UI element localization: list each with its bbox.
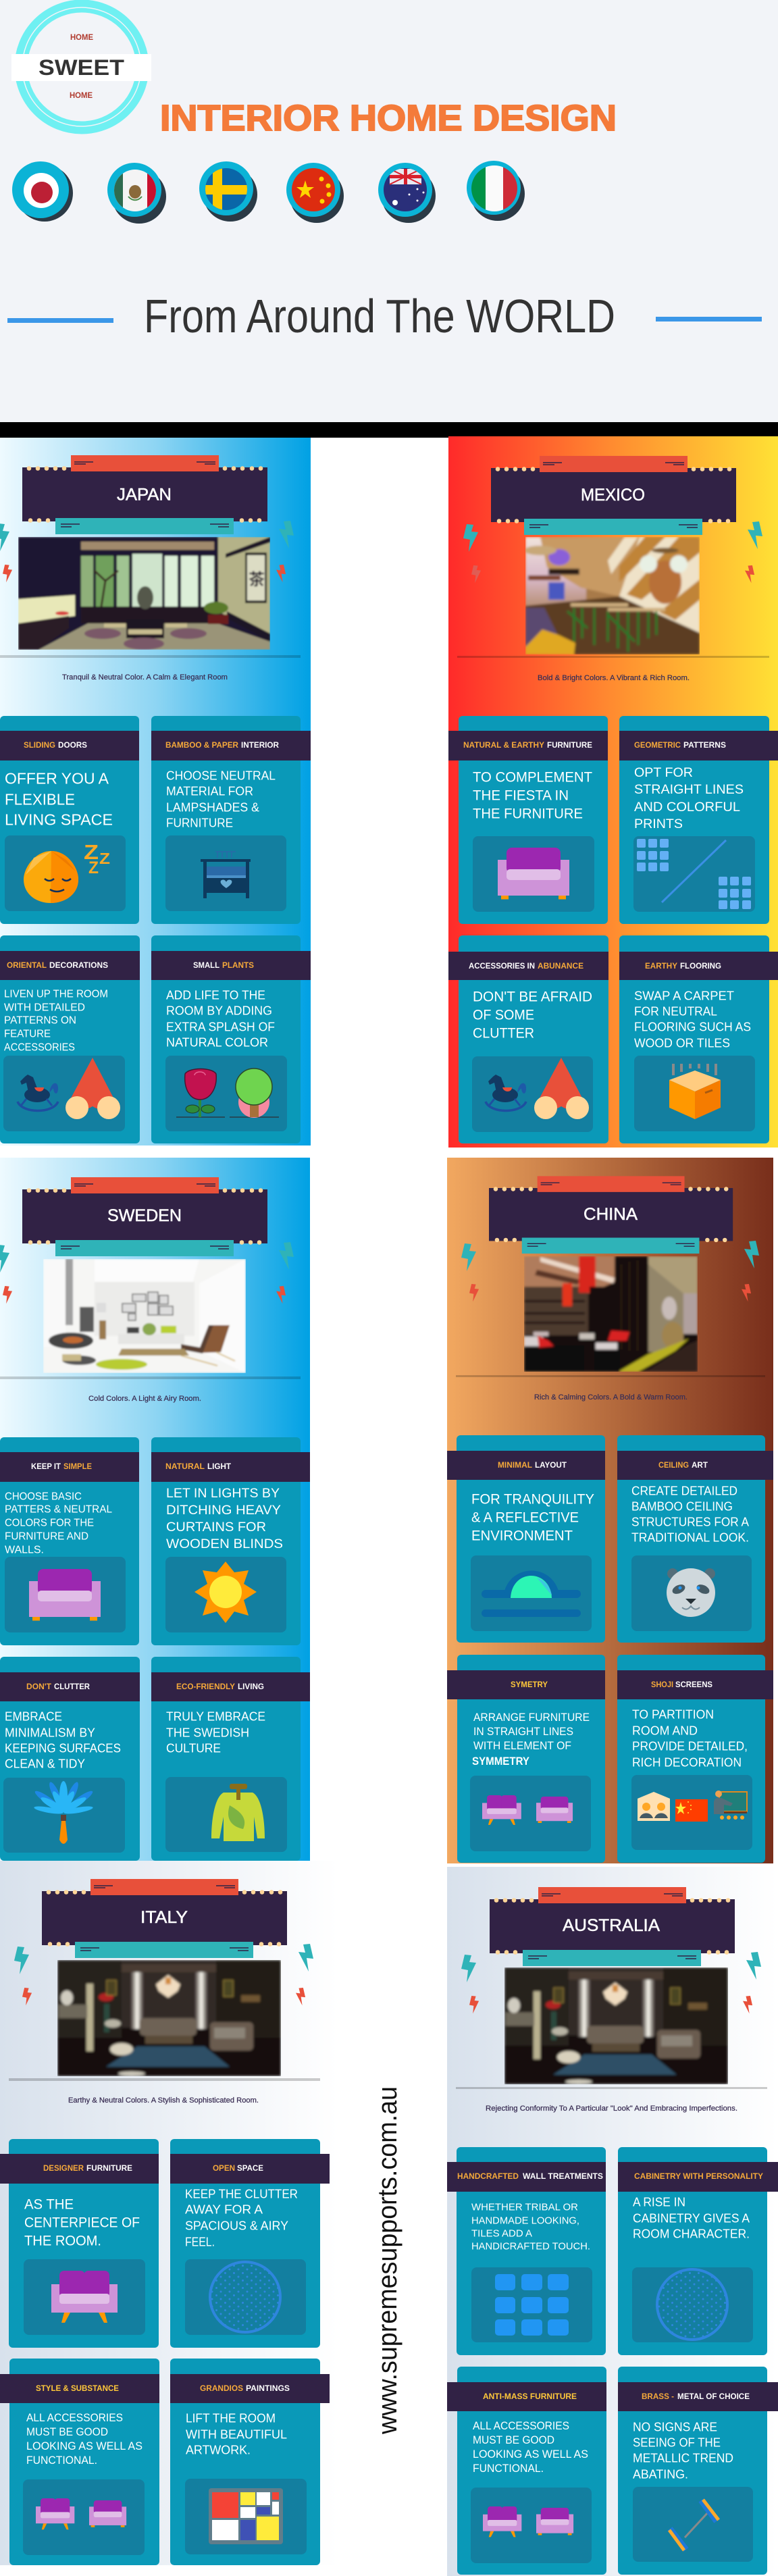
caption: Tranquil & Neutral Color. A Calm & Elegant Room bbox=[62, 673, 228, 681]
body text: DON'T BE AFRAID bbox=[473, 989, 592, 1005]
photo: japan room bbox=[18, 537, 270, 650]
icon: feather duster bbox=[3, 1778, 125, 1853]
body text: FURNITURE AND bbox=[5, 1531, 88, 1543]
subtitle: from around the world: From Around The WORLD bbox=[144, 290, 615, 342]
body text: ARRANGE FURNITURE bbox=[473, 1711, 590, 1724]
card: accessories in abundance bbox=[448, 935, 608, 1143]
body text bbox=[4, 989, 108, 1054]
panel: mexico bbox=[448, 436, 778, 1148]
banner: japan: JAPAN bbox=[117, 485, 172, 504]
title: INTERIOR HOME DESIGN bbox=[160, 99, 617, 138]
icon: abstract painting bbox=[185, 2479, 307, 2554]
banner: australia bbox=[490, 1887, 735, 1966]
body text: DITCHING HEAVY bbox=[166, 1503, 281, 1518]
caption: Rich & Calming Colors. A Bold & Warm Room. bbox=[534, 1393, 688, 1401]
icon: lightning bolts bbox=[461, 1241, 759, 1302]
body text bbox=[166, 769, 276, 829]
icon: sunrise over water bbox=[471, 1555, 592, 1631]
body text: TO PARTITION bbox=[632, 1707, 714, 1721]
body text bbox=[186, 2411, 287, 2457]
icon: sleeping face bbox=[5, 835, 126, 911]
icon: dotted plate bbox=[632, 2267, 753, 2342]
icon: rose and tree bbox=[165, 1056, 287, 1131]
label bbox=[457, 2171, 603, 2181]
panel: japan bbox=[0, 438, 311, 1145]
logo: home sweet home badge: HOME bbox=[70, 32, 93, 42]
card: anti-mass furniture bbox=[447, 2367, 606, 2575]
label: DOORS bbox=[58, 740, 87, 750]
icon: home, china flag and teacher bbox=[631, 1775, 752, 1850]
card: oriental decorations bbox=[0, 935, 140, 1143]
banner: japan bbox=[22, 455, 267, 534]
banner: china bbox=[489, 1176, 733, 1254]
card: small plants bbox=[151, 935, 311, 1143]
card: earthy flooring bbox=[619, 935, 778, 1143]
body text bbox=[5, 1710, 121, 1771]
label bbox=[31, 1462, 92, 1471]
icon: lightning bolts bbox=[0, 521, 294, 582]
label: GEOMETRIC bbox=[634, 740, 681, 750]
body text: HANDMADE LOOKING, bbox=[471, 2215, 579, 2226]
label bbox=[176, 1682, 264, 1691]
label bbox=[43, 2163, 132, 2173]
body text: SPACIOUS & AIRY bbox=[185, 2219, 288, 2233]
body text: ROOM AND bbox=[632, 1724, 698, 1737]
body text bbox=[471, 2201, 590, 2252]
caption: Earthy & Neutral Colors. A Stylish & Sophisticated Room. bbox=[68, 2096, 259, 2105]
body text bbox=[26, 2412, 142, 2467]
body text: ROOM CHARACTER. bbox=[633, 2227, 750, 2241]
body text bbox=[166, 1486, 283, 1551]
body text: IN STRAIGHT LINES bbox=[473, 1726, 573, 1738]
body text: LIFT THE ROOM bbox=[186, 2411, 276, 2425]
icon: sleeping face: Z bbox=[99, 850, 110, 867]
divider bbox=[9, 2078, 320, 2081]
label: ABUNANCE bbox=[538, 961, 584, 971]
body text: & A REFLECTIVE bbox=[471, 1510, 579, 1526]
label: NATURAL & EARTHY bbox=[463, 740, 544, 750]
body text: BAMBOO CEILING bbox=[631, 1499, 733, 1513]
body text bbox=[633, 2421, 733, 2481]
card: minimal layout bbox=[447, 1435, 605, 1643]
photo: australia room bbox=[504, 1967, 728, 2084]
body text: PRINTS bbox=[634, 817, 683, 831]
label bbox=[645, 961, 721, 971]
logo: home sweet home badge: HOME bbox=[70, 91, 93, 100]
label: SCREENS bbox=[675, 1680, 712, 1689]
body text: CURTAINS FOR bbox=[166, 1520, 266, 1535]
body text: THE FIESTA IN bbox=[473, 788, 569, 804]
label bbox=[26, 1682, 90, 1691]
label: LIGHT bbox=[207, 1462, 232, 1471]
body text: THE SWEDISH bbox=[166, 1726, 249, 1740]
label: INTERIOR bbox=[241, 740, 279, 750]
icon: brass barbell bbox=[633, 2487, 753, 2562]
body text: WALLS. bbox=[5, 1545, 44, 1556]
icon: flooring box bbox=[634, 1056, 755, 1131]
label: CEILING bbox=[658, 1460, 689, 1470]
label: SHOJI bbox=[651, 1680, 673, 1689]
label: ANTI-MASS FURNITURE bbox=[483, 2392, 577, 2401]
body text: LOOKING AS WELL AS bbox=[26, 2440, 142, 2452]
body text: CREATE DETAILED bbox=[631, 1485, 737, 1498]
body text: AS THE bbox=[24, 2197, 74, 2213]
body text bbox=[633, 2195, 750, 2241]
panel: sweden bbox=[0, 1158, 310, 1861]
label: METAL OF CHOICE bbox=[677, 2392, 750, 2401]
icon: japan flag bbox=[12, 161, 73, 222]
label: SPACE bbox=[237, 2163, 263, 2173]
body text bbox=[634, 765, 744, 831]
body text: WITH DETAILED bbox=[4, 1002, 85, 1014]
card: style and substance bbox=[0, 2359, 159, 2565]
label: GRANDIOS bbox=[200, 2384, 243, 2393]
body text: WOODEN BLINDS bbox=[166, 1537, 283, 1551]
body text: ADD LIFE TO THE bbox=[166, 989, 265, 1002]
photo: sweden room bbox=[43, 1259, 246, 1373]
label bbox=[165, 1462, 232, 1471]
body text: LOOKING AS WELL AS bbox=[473, 2448, 588, 2461]
label: DECORATIONS bbox=[49, 960, 108, 970]
divider bbox=[456, 1375, 765, 1377]
label bbox=[213, 2163, 263, 2173]
body text: MUST BE GOOD bbox=[473, 2434, 554, 2446]
body text: OPT FOR bbox=[634, 765, 693, 780]
body text: EXTRA SPLASH OF bbox=[166, 1020, 275, 1033]
card: natural and earthy furniture bbox=[448, 716, 608, 924]
label bbox=[200, 2384, 290, 2393]
body text bbox=[472, 1711, 590, 1768]
flag row bbox=[12, 161, 525, 224]
body text: AND COLORFUL bbox=[634, 800, 740, 815]
label bbox=[658, 1460, 708, 1470]
body text: CABINETRY GIVES A bbox=[633, 2211, 750, 2225]
card: natural light bbox=[151, 1437, 310, 1645]
body text: ABATING. bbox=[633, 2468, 688, 2481]
card: don't clutter bbox=[0, 1657, 140, 1861]
body text: FLEXIBLE bbox=[5, 790, 75, 808]
body text: SYMMETRY bbox=[472, 1755, 529, 1768]
icon: sleeping face: Z bbox=[84, 840, 99, 864]
body text: SEEING OF THE bbox=[633, 2436, 721, 2449]
body text: TILES ADD A bbox=[471, 2227, 532, 2239]
card: bamboo and paper interior bbox=[151, 716, 311, 924]
caption: Rejecting Conformity To A Particular "Look" And Embracing Imperfections. bbox=[486, 2105, 737, 2113]
label: SIMPLE bbox=[63, 1462, 92, 1471]
label: BAMBOO & PAPER bbox=[165, 740, 238, 750]
label: LIVING bbox=[238, 1682, 264, 1691]
icon: italy flag bbox=[467, 161, 525, 221]
body text: SWAP A CARPET bbox=[634, 989, 734, 1002]
label: FURNITURE bbox=[86, 2163, 132, 2173]
icon: sofa bbox=[473, 836, 594, 912]
label bbox=[651, 1680, 712, 1689]
label bbox=[498, 1460, 567, 1470]
body text: WOOD OR TILES bbox=[634, 1036, 730, 1050]
banner: mexico bbox=[491, 456, 736, 535]
icon: china flag bbox=[286, 163, 344, 223]
body text: WHETHER TRIBAL OR bbox=[471, 2201, 578, 2213]
label: LAYOUT bbox=[535, 1460, 567, 1470]
divider bbox=[457, 656, 769, 658]
card: keep it simple bbox=[0, 1437, 139, 1645]
body text: STRUCTURES FOR A bbox=[631, 1516, 749, 1529]
label: ECO-FRIENDLY bbox=[176, 1682, 235, 1691]
body text: HANDICRAFTED TOUCH. bbox=[471, 2240, 590, 2252]
label: CABINETRY WITH PERSONALITY bbox=[634, 2171, 763, 2181]
body text bbox=[632, 1707, 748, 1770]
body text: OF SOME bbox=[473, 1008, 534, 1023]
label: HANDCRAFTED bbox=[457, 2171, 519, 2181]
label bbox=[24, 740, 87, 750]
divider bbox=[456, 2087, 767, 2089]
card: sliding doors bbox=[0, 716, 139, 924]
body text: CLUTTER bbox=[473, 1026, 534, 1041]
banner: australia: AUSTRALIA bbox=[563, 1916, 660, 1935]
label bbox=[165, 740, 279, 750]
body text: FEATURE bbox=[4, 1029, 51, 1040]
card: grandios paintings bbox=[170, 2359, 330, 2565]
label: FLOORING bbox=[680, 961, 721, 971]
body text: EMBRACE bbox=[5, 1710, 62, 1724]
label: DON'T bbox=[26, 1682, 52, 1691]
body text: ACCESSORIES bbox=[4, 1042, 75, 1054]
label: CLUTTER bbox=[54, 1682, 90, 1691]
body text: COLORS FOR THE bbox=[5, 1518, 94, 1529]
icon: tile grid bbox=[471, 2267, 592, 2342]
body text: OFFER YOU A bbox=[5, 770, 109, 788]
body text: WITH ELEMENT OF bbox=[473, 1740, 571, 1752]
label bbox=[469, 961, 584, 971]
label: FURNITURE bbox=[547, 740, 592, 750]
body text: MUST BE GOOD bbox=[26, 2426, 108, 2438]
banner: sweden: SWEDEN bbox=[107, 1206, 182, 1225]
body text: FEEL. bbox=[185, 2236, 215, 2249]
body text: LET IN LIGHTS BY bbox=[166, 1486, 280, 1501]
logo: home sweet home badge: SWEET bbox=[38, 55, 125, 80]
body text bbox=[473, 2420, 588, 2475]
label bbox=[193, 960, 254, 970]
body text: A RISE IN bbox=[633, 2195, 685, 2209]
label bbox=[463, 740, 592, 750]
label: PLANTS bbox=[222, 960, 254, 970]
icon: sofa bbox=[5, 1557, 126, 1632]
body text: LIVING SPACE bbox=[5, 810, 113, 828]
body text: KEEPING SURFACES bbox=[5, 1741, 121, 1755]
banner: china: CHINA bbox=[584, 1205, 638, 1224]
body text: RICH DECORATION bbox=[632, 1756, 742, 1770]
label: NATURAL bbox=[165, 1462, 205, 1471]
label bbox=[642, 2392, 750, 2401]
icon: lightning bolts bbox=[0, 1242, 294, 1304]
body text bbox=[631, 1485, 749, 1544]
body text: ARTWORK. bbox=[186, 2444, 251, 2457]
icon: two chairs bbox=[23, 2479, 145, 2555]
icon: sofa bbox=[24, 2259, 145, 2335]
body text: TO COMPLEMENT bbox=[473, 770, 592, 785]
card: cabinetry with personality bbox=[618, 2147, 778, 2355]
body text: TRADITIONAL LOOK. bbox=[631, 1530, 749, 1544]
label: MINIMAL bbox=[498, 1460, 532, 1470]
body text bbox=[471, 1492, 594, 1544]
icon: lightning bolts bbox=[461, 1952, 761, 2013]
label bbox=[7, 960, 108, 970]
icon: rocking horse and toy bbox=[3, 1056, 125, 1131]
label: SYMETRY bbox=[511, 1680, 548, 1689]
body text: PATTERS & NEUTRAL bbox=[5, 1504, 112, 1516]
icon: green sweater bbox=[165, 1777, 287, 1852]
panel: australia bbox=[447, 1867, 778, 2576]
photo: italy room bbox=[57, 1960, 281, 2076]
body text: CLEAN & TIDY bbox=[5, 1757, 85, 1771]
card: brass metal of choice bbox=[618, 2367, 778, 2575]
label: PATTERNS bbox=[683, 740, 726, 750]
label bbox=[634, 740, 726, 750]
body text: ENVIRONMENT bbox=[471, 1528, 573, 1544]
body text: ROOM BY ADDING bbox=[166, 1004, 272, 1017]
body text: METALLIC TREND bbox=[633, 2452, 733, 2465]
body text: FOR TRANQUILITY bbox=[471, 1492, 594, 1508]
card: open space bbox=[170, 2139, 330, 2348]
panel: china bbox=[447, 1158, 773, 1863]
banner: sweden bbox=[22, 1177, 267, 1256]
card: symetry bbox=[447, 1655, 605, 1863]
body text: THE FURNITURE bbox=[473, 806, 583, 822]
icon: geometric pattern bbox=[633, 836, 755, 912]
body text: STRAIGHT LINES bbox=[634, 782, 744, 797]
body text: CHOOSE NEUTRAL bbox=[166, 769, 276, 782]
body text: MATERIAL FOR bbox=[166, 785, 253, 798]
icon: sweden flag bbox=[199, 161, 257, 222]
logo: home sweet home badge bbox=[11, 6, 151, 128]
card: eco-friendly living bbox=[151, 1657, 310, 1861]
divider bbox=[0, 1376, 301, 1379]
body text bbox=[473, 989, 592, 1041]
label: PAINTINGS bbox=[246, 2384, 290, 2393]
body text: FOR NEUTRAL bbox=[634, 1005, 717, 1019]
divider bbox=[0, 655, 301, 658]
caption: Cold Colors. A Light & Airy Room. bbox=[88, 1395, 201, 1403]
photo: mexico room bbox=[524, 537, 700, 654]
icon: two chairs bbox=[471, 2488, 592, 2563]
website address: www.supremesupports.com.au bbox=[373, 2086, 403, 2435]
body text bbox=[166, 1710, 265, 1755]
body text: CULTURE bbox=[166, 1741, 221, 1755]
body text: FLOORING SUCH AS bbox=[634, 1020, 751, 1033]
label: SLIDING bbox=[24, 740, 55, 750]
label: KEEP IT bbox=[31, 1462, 61, 1471]
label: STYLE & SUBSTANCE bbox=[36, 2384, 119, 2393]
body text: WITH BEAUTIFUL bbox=[186, 2427, 287, 2441]
banner: italy bbox=[42, 1879, 287, 1958]
card: designer furniture bbox=[0, 2139, 159, 2348]
icon: crib bbox=[165, 835, 286, 911]
body text: MINIMALISM BY bbox=[5, 1726, 95, 1740]
icon: australia flag bbox=[378, 163, 436, 223]
card: ceiling art bbox=[617, 1435, 773, 1643]
body text bbox=[5, 770, 113, 828]
body text: LAMPSHADES & bbox=[166, 801, 259, 815]
body text: LIVEN UP THE ROOM bbox=[4, 989, 108, 1000]
body text: TRULY EMBRACE bbox=[166, 1710, 265, 1724]
body text bbox=[185, 2187, 298, 2249]
label: OPEN bbox=[213, 2163, 235, 2173]
label: SMALL bbox=[193, 960, 219, 970]
body text: CHOOSE BASIC bbox=[5, 1491, 82, 1503]
icon: sun bbox=[165, 1557, 286, 1632]
body text: THE ROOM. bbox=[24, 2234, 101, 2249]
body text bbox=[473, 770, 592, 822]
label: DESIGNER bbox=[43, 2163, 84, 2173]
body text: FURNITURE bbox=[166, 816, 233, 829]
body text: KEEP THE CLUTTER bbox=[185, 2187, 298, 2200]
icon: lightning bolts bbox=[14, 1944, 313, 2005]
body text: FUNCTIONAL. bbox=[26, 2454, 97, 2467]
label: ART bbox=[692, 1460, 708, 1470]
card: shoji screens bbox=[617, 1655, 773, 1863]
body text: PROVIDE DETAILED, bbox=[632, 1740, 748, 1753]
caption: Bold & Bright Colors. A Vibrant & Rich Room. bbox=[538, 674, 690, 682]
body text: ALL ACCESSORIES bbox=[26, 2412, 123, 2424]
body text: NATURAL COLOR bbox=[166, 1036, 268, 1050]
icon: dotted plate bbox=[185, 2259, 306, 2335]
body text bbox=[5, 1491, 112, 1556]
label: ORIENTAL bbox=[7, 960, 47, 970]
banner: italy: ITALY bbox=[140, 1908, 188, 1927]
body text bbox=[24, 2197, 140, 2249]
icon: sleeping face: Z bbox=[88, 858, 99, 877]
body text: AWAY FOR A bbox=[185, 2203, 263, 2217]
banner: mexico: MEXICO bbox=[581, 486, 645, 505]
body text bbox=[166, 989, 275, 1050]
icon: lightning bolts bbox=[463, 521, 762, 583]
body text: FUNCTIONAL. bbox=[473, 2463, 544, 2475]
card: geometric patterns bbox=[619, 716, 778, 924]
label: ACCESSORIES IN bbox=[469, 961, 535, 971]
photo: japan room: 茶 bbox=[249, 571, 265, 589]
body text bbox=[634, 989, 751, 1050]
body text: CENTERPIECE OF bbox=[24, 2215, 140, 2231]
photo: china room bbox=[524, 1256, 698, 1372]
card: handcrafted wall treatments bbox=[447, 2147, 606, 2355]
panel: italy bbox=[0, 1861, 338, 2565]
label: WALL TREATMENTS bbox=[523, 2171, 603, 2181]
icon: rocking horse and toy bbox=[472, 1056, 593, 1132]
body text: ALL ACCESSORIES bbox=[473, 2420, 569, 2432]
label: BRASS - bbox=[642, 2392, 674, 2401]
body text: NO SIGNS ARE bbox=[633, 2421, 717, 2434]
icon: two chairs bbox=[470, 1776, 591, 1851]
icon: panda bbox=[631, 1555, 752, 1631]
label: EARTHY bbox=[645, 961, 677, 971]
icon: mexico flag bbox=[107, 163, 166, 224]
body text: PATTERNS ON bbox=[4, 1015, 76, 1027]
